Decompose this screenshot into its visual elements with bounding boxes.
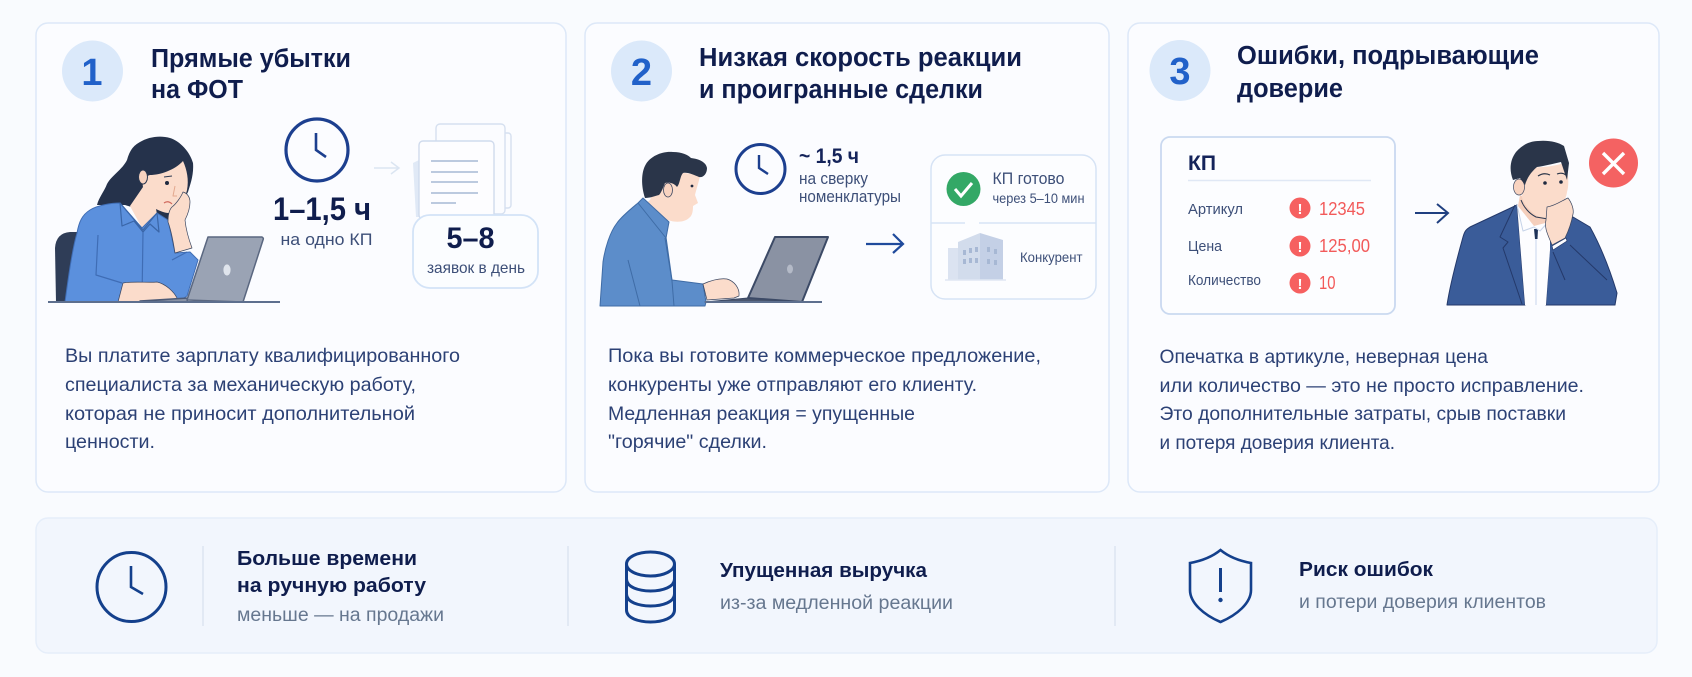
ready text: через 5–10 мин <box>992 191 1084 206</box>
summary: error risk: Риск ошибок <box>1299 559 1434 581</box>
time for nomenclature check: номенклатуры <box>799 188 901 206</box>
row: article: Артикул <box>1188 201 1243 218</box>
number badge 2: 2 <box>631 52 652 94</box>
panel: direct payroll losses <box>36 23 566 492</box>
icon: document stack <box>413 124 511 219</box>
row: price: Цена <box>1188 238 1223 255</box>
summary: lost revenue <box>720 560 953 614</box>
time for nomenclature check: на сверку <box>799 170 869 188</box>
row: article: 12345 <box>1319 198 1365 219</box>
time per proposal: на одно КП <box>280 230 372 249</box>
body text 1: специалиста за механическую работу, <box>65 374 416 396</box>
heading 2: и проигранные сделки <box>699 76 983 104</box>
body text 2: Пока вы готовите коммерческое предложение, <box>608 345 1041 367</box>
number badge 2 <box>611 40 672 102</box>
number badge 1 <box>62 40 123 102</box>
row: quantity: 10 <box>1319 272 1336 293</box>
heading 3 <box>1237 42 1539 103</box>
arrow <box>1415 204 1448 223</box>
heading 1: Прямые убытки <box>151 45 351 73</box>
icon: warning shield <box>1190 550 1251 622</box>
summary: more manual time: на ручную работу <box>237 575 427 597</box>
time per proposal <box>273 191 372 249</box>
panel: errors undermining trust <box>1128 23 1659 492</box>
time for nomenclature check <box>799 145 901 206</box>
arrow <box>866 234 903 253</box>
row: quantity: ! <box>1298 276 1302 293</box>
icon: red cross <box>1589 138 1638 188</box>
summary: error risk: и потери доверия клиентов <box>1299 592 1546 613</box>
icon: green check <box>946 172 980 206</box>
icon: clock <box>286 119 348 181</box>
icon: clock <box>97 552 166 622</box>
row: price <box>1188 235 1370 256</box>
body text 2 <box>608 345 1041 453</box>
row: article <box>1188 198 1365 219</box>
illustration: tired woman at laptop <box>48 137 280 302</box>
arrow: faint <box>374 162 399 174</box>
number badge 1: 1 <box>81 52 103 94</box>
callout: requests per day <box>413 215 538 288</box>
time per proposal: 1–1,5 ч <box>273 191 371 227</box>
row: price: ! <box>1298 239 1302 256</box>
summary: lost revenue: из-за медленной реакции <box>720 593 953 614</box>
body text 3: Опечатка в артикуле, неверная цена <box>1160 346 1488 368</box>
row: price: 125,00 <box>1319 235 1370 256</box>
body text 2: "горячие" сделки. <box>608 431 767 453</box>
illustration: man at laptop <box>600 152 828 306</box>
summary: error risk <box>1299 559 1546 613</box>
comparison card: ready proposal vs competitor <box>931 155 1096 299</box>
body text 1 <box>65 345 460 453</box>
illustration: worried man in suit <box>1447 141 1617 305</box>
competitor label: Конкурент <box>1020 249 1083 265</box>
body text 3: или количество — это не просто исправление. <box>1160 375 1584 397</box>
proposal card with errors <box>1161 137 1395 314</box>
icon: competitor building <box>945 233 1006 280</box>
body text 1: ценности. <box>65 431 155 453</box>
body text 2: Медленная реакция = упущенные <box>608 403 915 425</box>
body text 3: Это дополнительные затраты, срыв поставки <box>1160 403 1566 425</box>
heading 1: на ФОТ <box>151 76 243 104</box>
ready text: КП готово <box>992 170 1064 188</box>
summary: more manual time: меньше — на продажи <box>237 605 444 626</box>
icon: clock <box>736 144 785 194</box>
row: quantity: Количество <box>1188 272 1261 289</box>
callout: requests per day: 5–8 <box>446 222 494 255</box>
body text 1: Вы платите зарплату квалифицированного <box>65 345 460 367</box>
heading 2 <box>699 44 1022 104</box>
summary band <box>36 518 1657 653</box>
callout: requests per day: заявок в день <box>427 260 525 277</box>
body text 3: и потеря доверия клиента. <box>1160 432 1395 454</box>
summary: more manual time: Больше времени <box>237 548 417 570</box>
heading 1 <box>151 45 351 104</box>
heading 3: Ошибки, подрывающие <box>1237 42 1539 70</box>
row: article: ! <box>1298 201 1302 218</box>
row: quantity <box>1188 272 1336 294</box>
body text 3 <box>1160 346 1584 454</box>
body text 1: которая не приносит дополнительной <box>65 403 415 425</box>
heading 2: Низкая скорость реакции <box>699 44 1022 72</box>
body text 2: конкуренты уже отправляют его клиенту. <box>608 374 977 396</box>
time for nomenclature check: ~ 1,5 ч <box>799 145 859 168</box>
summary: more manual time <box>237 548 444 626</box>
ready text <box>992 170 1084 206</box>
number badge 3 <box>1150 40 1210 101</box>
number badge 3: 3 <box>1169 51 1191 93</box>
heading 3: доверие <box>1237 75 1343 103</box>
icon: database stack <box>626 552 674 622</box>
proposal card with errors: КП <box>1188 152 1216 175</box>
panel: slow reaction and lost deals <box>585 23 1109 492</box>
summary: lost revenue: Упущенная выручка <box>720 560 928 582</box>
